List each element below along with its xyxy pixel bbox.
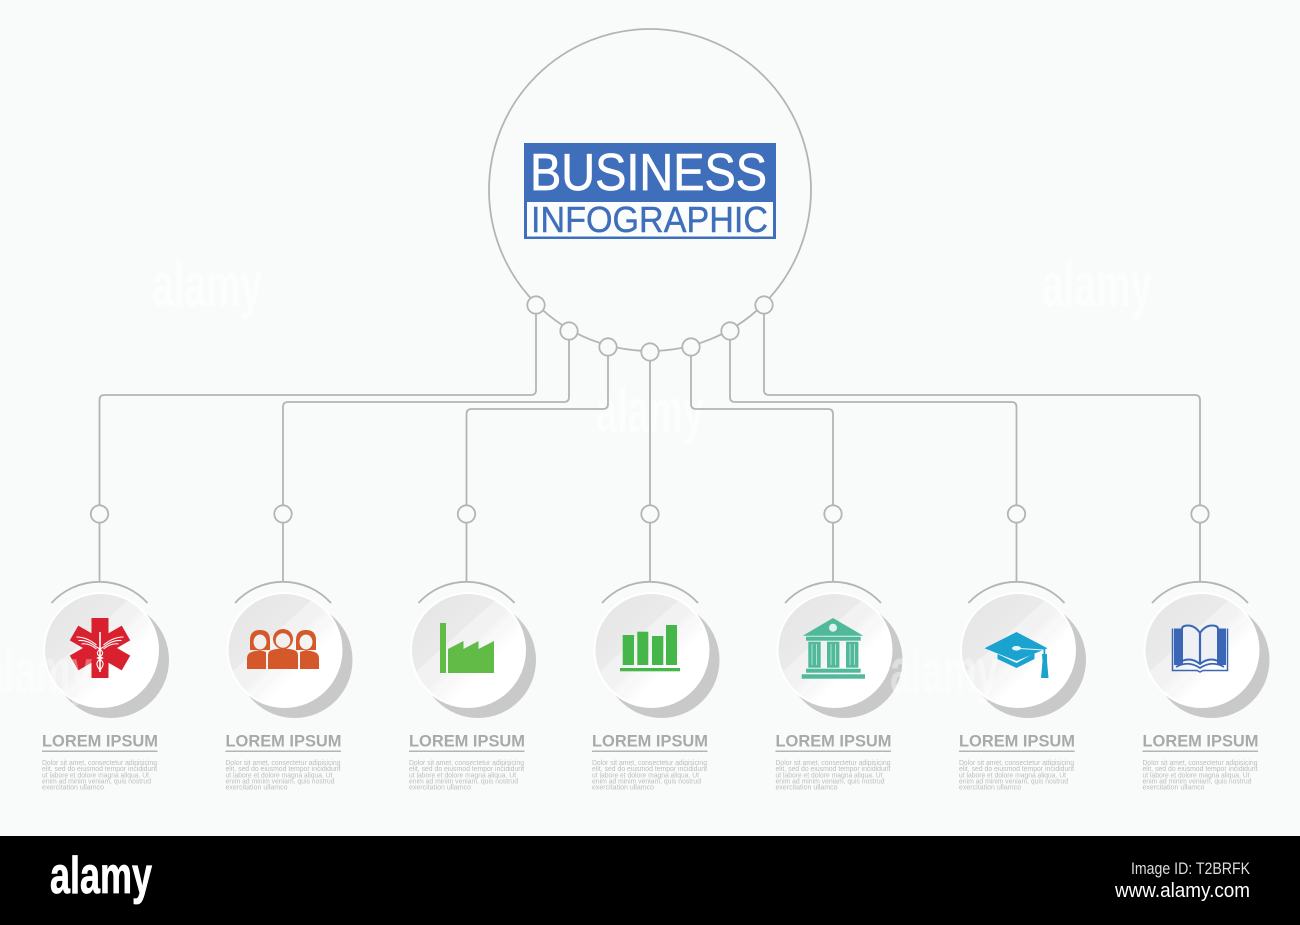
icon: graduation cap	[984, 632, 1048, 678]
item 2 caption: ut labore et dolore magna aliqua. Ut	[226, 770, 332, 779]
item 1 caption	[42, 733, 158, 792]
item 5 caption: elit, sed do eiusmod tempor incididunt	[776, 764, 890, 773]
watermark over discs: alamy	[890, 637, 998, 706]
image id: Image ID: T2BRFK	[1131, 859, 1251, 878]
item 4 caption: exercitation ullamco	[592, 783, 654, 792]
title: BUSINESS	[530, 144, 767, 202]
item 2 caption: exercitation ullamco	[226, 783, 288, 792]
item 6 caption: enim ad minim veniam, quis nostrud	[959, 776, 1068, 786]
watermark text: alamy	[596, 377, 704, 446]
icon: factory	[440, 623, 494, 673]
item 6: graduation cap	[956, 505, 1086, 718]
item 3: factory	[406, 505, 536, 718]
watermark over discs	[0, 637, 998, 706]
item 6 caption: elit, sed do eiusmod tempor incididunt	[959, 764, 1074, 773]
footer logo: alamy	[50, 847, 152, 905]
icon: bar chart	[620, 625, 680, 671]
icon: book	[1172, 626, 1228, 672]
title	[524, 143, 776, 240]
item 1 caption: elit, sed do eiusmod tempor incididunt	[42, 764, 157, 773]
item 3 caption: exercitation ullamco	[409, 783, 471, 792]
item 2 caption: elit, sed do eiusmod tempor incididunt	[226, 764, 340, 773]
item 7 caption: elit, sed do eiusmod tempor incididunt	[1142, 764, 1258, 773]
item 7 caption: ut labore et dolore magna aliqua. Ut	[1142, 770, 1250, 779]
item 7 caption: enim ad minim veniam, quis nostrud	[1142, 776, 1252, 786]
item 7 caption	[1142, 733, 1258, 792]
item 3 caption	[409, 733, 525, 792]
item 7 caption: LOREM IPSUM	[1142, 733, 1258, 751]
item 6 caption: exercitation ullamco	[959, 783, 1021, 792]
item 1 caption: enim ad minim veniam, quis nostrud	[42, 776, 151, 786]
item 3 caption: LOREM IPSUM	[409, 733, 525, 751]
item 4 caption	[592, 733, 708, 792]
item 5 caption: enim ad minim veniam, quis nostrud	[776, 776, 884, 786]
title: INFOGRAPHIC	[531, 199, 768, 240]
item 5: bank	[773, 505, 902, 718]
watermark text: alamy	[1042, 251, 1152, 320]
item 4 caption: enim ad minim veniam, quis nostrud	[592, 776, 701, 786]
item 7: book	[1140, 505, 1270, 718]
watermark text: alamy	[152, 251, 262, 320]
item 6 caption	[959, 733, 1075, 792]
item 3 caption: enim ad minim veniam, quis nostrud	[409, 776, 518, 786]
item 2 caption: Dolor sit amet, consectetur adipisicing	[226, 758, 340, 767]
item 7 caption: exercitation ullamco	[1142, 783, 1204, 792]
item 6 caption: ut labore et dolore magna aliqua. Ut	[959, 770, 1066, 779]
circle connector nodes	[527, 296, 773, 361]
connector lines	[100, 305, 1200, 582]
item 3 caption: elit, sed do eiusmod tempor incididunt	[409, 764, 524, 773]
watermark text	[152, 251, 1152, 446]
item 1 caption: ut labore et dolore magna aliqua. Ut	[42, 770, 149, 779]
item 6 caption: Dolor sit amet, consectetur adipisicing	[959, 758, 1074, 767]
item 2 caption	[226, 733, 342, 792]
item 3 caption: Dolor sit amet, consectetur adipisicing	[409, 758, 524, 767]
item 5 caption: LOREM IPSUM	[776, 733, 892, 751]
footer bar	[0, 836, 1300, 925]
item 1: medical	[40, 505, 169, 718]
item 4 caption: LOREM IPSUM	[592, 733, 708, 751]
item 2 caption: enim ad minim veniam, quis nostrud	[226, 776, 334, 786]
item 1 caption: exercitation ullamco	[42, 783, 104, 792]
item 1 caption: Dolor sit amet, consectetur adipisicing	[42, 758, 157, 767]
item 6 caption: LOREM IPSUM	[959, 733, 1075, 751]
item 5 caption: Dolor sit amet, consectetur adipisicing	[776, 758, 890, 767]
icon: people	[247, 629, 319, 669]
item 4 caption: ut labore et dolore magna aliqua. Ut	[592, 770, 699, 779]
item 3 caption: ut labore et dolore magna aliqua. Ut	[409, 770, 516, 779]
item 5 caption	[776, 733, 892, 792]
item 4 caption: Dolor sit amet, consectetur adipisicing	[592, 758, 707, 767]
item 2: people	[223, 505, 352, 718]
item 4: bar chart	[590, 505, 720, 718]
item 2 caption: LOREM IPSUM	[226, 733, 342, 751]
icon: medical star	[70, 618, 130, 678]
item 7 caption: Dolor sit amet, consectetur adipisicing	[1142, 758, 1258, 767]
central circle	[489, 29, 811, 351]
icon: bank	[802, 618, 865, 679]
website: www.alamy.com	[1114, 880, 1250, 902]
item 4 caption: elit, sed do eiusmod tempor incididunt	[592, 764, 707, 773]
item 1 caption: LOREM IPSUM	[42, 733, 158, 751]
item 5 caption: exercitation ullamco	[776, 783, 838, 792]
item 5 caption: ut labore et dolore magna aliqua. Ut	[776, 770, 882, 779]
